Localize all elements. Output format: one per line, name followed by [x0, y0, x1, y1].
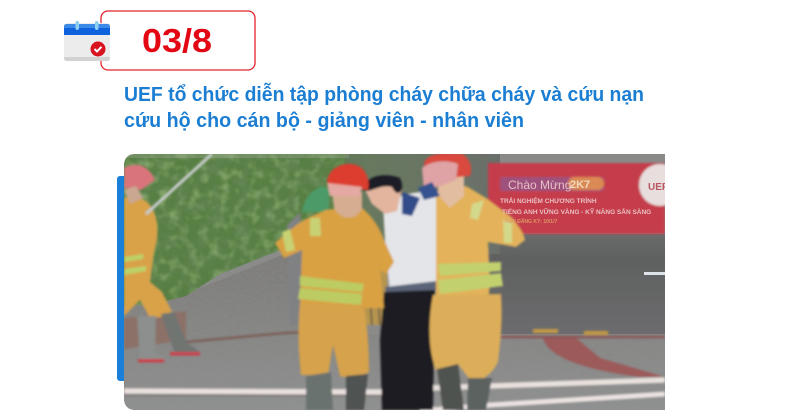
right carrying firefighter: [436, 186, 525, 300]
background haze behind people: [345, 154, 500, 254]
title: cứu hộ cho cán bộ - giảng viên - nhân viên: [124, 109, 524, 132]
centre student: [383, 192, 438, 294]
icon: calendar: [64, 21, 110, 61]
planter and floor lines: [124, 311, 186, 349]
date text: 03/8: [142, 23, 212, 60]
hose nozzle: [146, 154, 212, 214]
left firefighter: [124, 196, 174, 318]
photo: firefighters carrying a student during the drill: [124, 153, 681, 411]
banner text: TIẾNG ANH VỮNG VÀNG - KỸ NĂNG SẴN SÀNG: [502, 206, 651, 216]
person in green, background: [302, 186, 330, 212]
banner text: Chào Mừng: [508, 178, 571, 192]
hedge: [124, 154, 349, 309]
striped barrier: [364, 270, 388, 326]
banner text: [500, 178, 668, 225]
ground: [124, 256, 288, 410]
photo background: [124, 154, 665, 410]
banner text: HẠN ĐĂNG KÝ: 10/1/7: [505, 218, 557, 225]
white fire hoses: [124, 380, 665, 392]
banner text: 2K7: [570, 179, 590, 191]
wall: [470, 234, 665, 334]
left carrying firefighter: [275, 206, 394, 308]
gate post: [287, 212, 305, 325]
title: UEF tổ chức diễn tập phòng cháy chữa cháy và cứu nạn: [124, 82, 644, 106]
date badge: [101, 11, 255, 70]
accent bar: [117, 176, 129, 381]
title: [124, 82, 644, 132]
banner text: UEF: [648, 182, 668, 193]
banner text: TRẢI NGHIỆM CHƯƠNG TRÌNH: [500, 196, 597, 205]
banner: [488, 163, 665, 234]
